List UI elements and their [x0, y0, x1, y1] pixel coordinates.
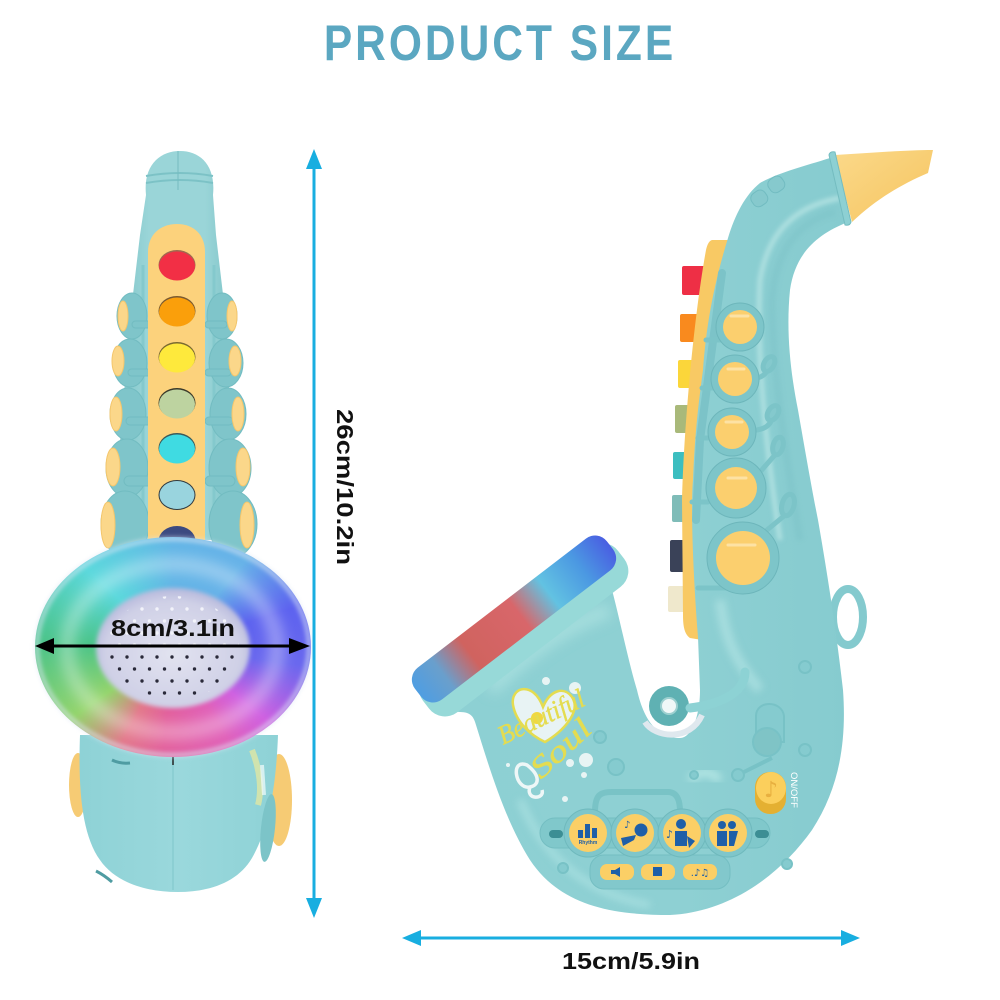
coloured note buttons: [158, 250, 196, 556]
colour LED ring: [35, 537, 311, 757]
saxophone player icon: [666, 819, 695, 848]
butterfly: [516, 764, 542, 797]
on off switch: ON/OFF: [788, 772, 799, 808]
yellow side strip: [682, 240, 735, 640]
side note button tabs: [668, 266, 708, 612]
rhythm icon: [578, 824, 598, 846]
beautiful soul decoration: [493, 677, 598, 802]
script lettering: Beautiful: [493, 683, 589, 750]
duet icon: [717, 821, 738, 846]
small control pills: [600, 864, 717, 880]
yellow button strip: [148, 224, 205, 560]
height arrow, blue: [306, 149, 322, 918]
main body: [430, 158, 848, 915]
saxophone player icon: ♪: [666, 828, 673, 841]
small flowers and dots: [506, 677, 593, 802]
height label: 26cm/10.2in: 26cm/10.2in: [332, 409, 358, 565]
bell rim lights: [406, 529, 622, 709]
singer icon: [621, 820, 648, 846]
rhythm icon: Rhythm: [579, 840, 598, 846]
width arrow, black: [35, 638, 310, 654]
saxophone: side view: [406, 150, 933, 915]
front side keys, left: [101, 293, 154, 557]
carrying loop: [833, 589, 863, 645]
small control pills: .♪♫: [691, 868, 709, 879]
key stems with curled tabs: [692, 340, 797, 588]
saxophone: front view: [35, 151, 311, 892]
mouthpiece: [835, 150, 933, 222]
key rail: [696, 273, 722, 520]
singer icon: ♪: [624, 820, 630, 831]
width label: 15cm/5.9in: 15cm/5.9in: [562, 948, 700, 974]
on off switch: [755, 772, 799, 814]
width arrow, blue: [402, 930, 860, 946]
front neck and upper body: [112, 151, 236, 540]
bell rim lip: [411, 535, 636, 725]
front side keys, right: [205, 293, 257, 557]
title: PRODUCT SIZE: [324, 15, 673, 71]
width dimension label: 8cm/3.1in: 8cm/3.1in: [111, 615, 235, 641]
body highlights and shading: [490, 198, 840, 905]
front lower body: [69, 735, 292, 892]
neck clips: [748, 174, 787, 209]
hook ring joint: [645, 672, 745, 735]
flower heart: [513, 689, 575, 742]
on off switch: ♪: [764, 778, 778, 803]
mode button panel: [540, 792, 770, 889]
side finger keys: [706, 303, 779, 594]
speaker grille: [96, 588, 250, 708]
beautiful soul decoration: Soul: [523, 712, 598, 785]
mouthpiece collar: [829, 152, 851, 225]
lever and rivets: [558, 661, 811, 873]
